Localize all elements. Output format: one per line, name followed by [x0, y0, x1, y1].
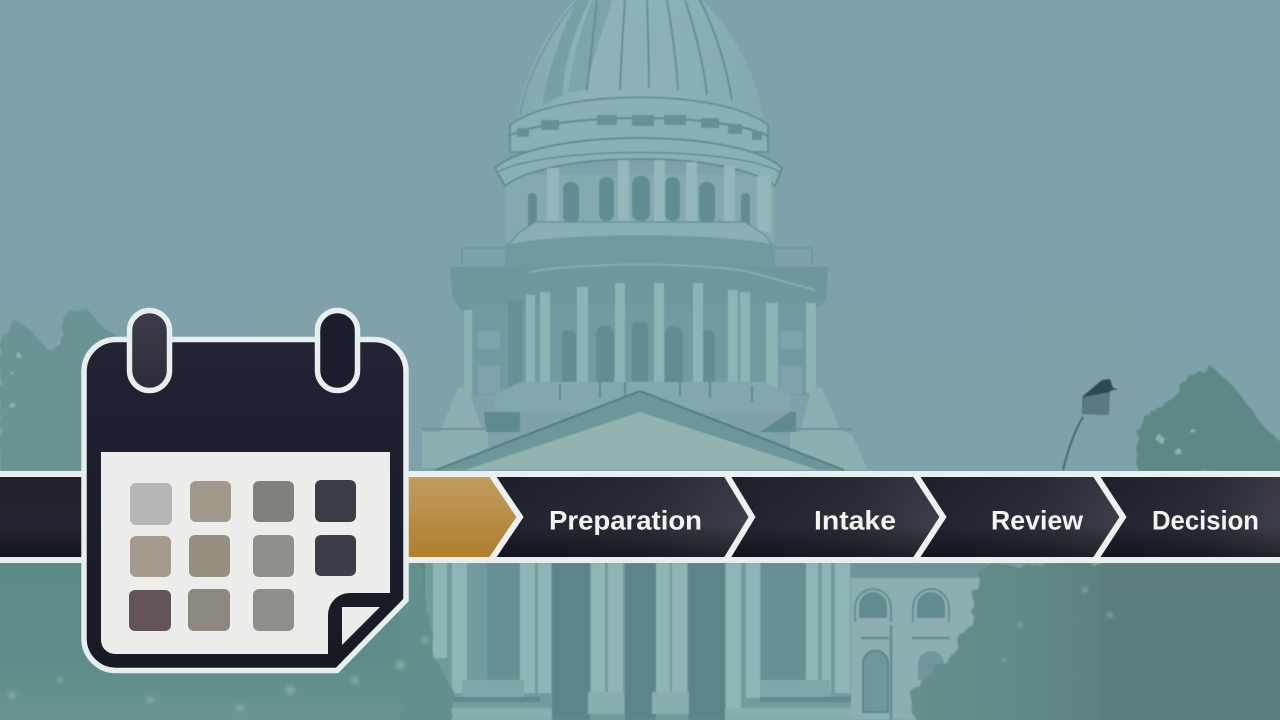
date grid [129, 480, 356, 631]
background: tree upper right [1138, 365, 1280, 474]
dark doorways [487, 563, 806, 720]
background: trees lower right [910, 563, 1280, 720]
step 4: Review [915, 477, 1123, 557]
column bases [440, 680, 980, 720]
dome cupola [508, 0, 768, 152]
binder ring left [130, 310, 170, 390]
step 3: Intake [726, 477, 943, 557]
step 2: Preparation [497, 477, 752, 557]
step 4: Review: Review [991, 506, 1084, 536]
background: trees upper left [0, 310, 125, 480]
left band segment [0, 477, 90, 557]
step 5: Decision [1095, 477, 1280, 557]
background: capitol dome [422, 0, 868, 470]
pediment [436, 391, 844, 470]
step 2: Preparation: Preparation [549, 506, 702, 536]
step 3: Intake: Intake [814, 506, 896, 536]
band outline [0, 471, 1280, 563]
calendar body [84, 340, 406, 670]
timeline band [0, 471, 1280, 563]
drum with windows [462, 138, 812, 268]
binder ring right [318, 310, 358, 390]
calendar page [101, 452, 390, 654]
band backing behind steps [505, 477, 1280, 557]
side turrets [422, 388, 868, 470]
columns [433, 563, 850, 713]
background: flag on pole [1063, 379, 1118, 470]
step 1: gold start chevron [405, 477, 517, 557]
colonnade [450, 263, 828, 412]
page curl [342, 607, 380, 645]
background: trees lower left [0, 563, 452, 720]
icon: calendar [84, 310, 406, 670]
step 5: Decision: Decision [1152, 506, 1259, 536]
right wing with arched windows [851, 564, 986, 720]
chevron separators [491, 474, 1123, 560]
background: lower building facade [420, 563, 986, 720]
